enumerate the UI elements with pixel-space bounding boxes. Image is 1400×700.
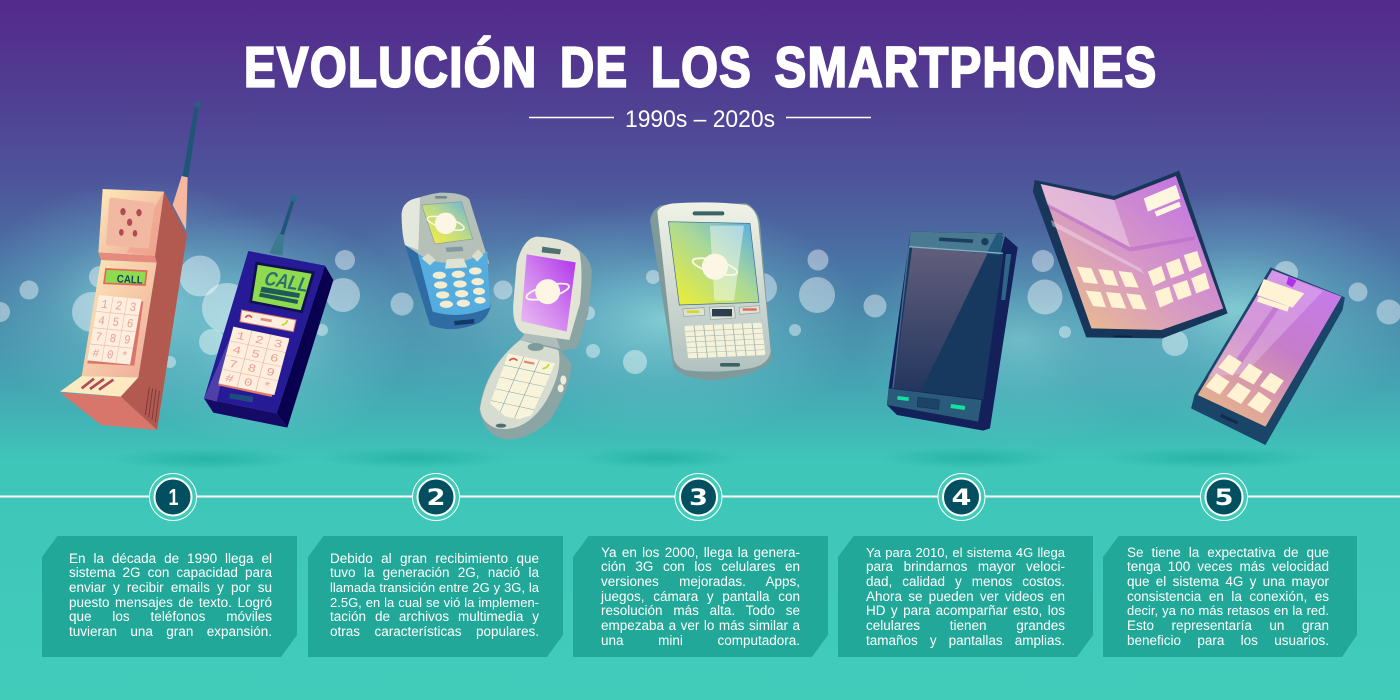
panel: step 4 description [838, 536, 1093, 657]
panel: step 4 description: dad, calidad y menos costos. [866, 574, 1065, 589]
panel: step 2 description: 2.5G, en la cual se vió la implemen- [330, 595, 539, 610]
panel: step 4 description: HD y para acomparñar esto, los [866, 603, 1065, 618]
phone: 3G QWERTY handset [650, 202, 772, 381]
subtitle with date range: 1990s – 2020s [625, 106, 775, 133]
phone: blue 2G handset: CALL [261, 268, 312, 297]
panel: step 3 description [573, 536, 828, 657]
phone: blue 2G handset: 6 [268, 351, 280, 365]
panel: step 2 description: Debido al gran recibimiento que [330, 550, 539, 566]
step marker 1: 1 [168, 484, 179, 510]
step marker 2 [412, 474, 460, 520]
phone: 4G touchscreen smartphone [887, 232, 1018, 431]
panel: step 4 description: Ya para 2010, el sistema 4G llega [866, 544, 1065, 560]
phone: blue 2G handset [204, 195, 333, 428]
phone: brick phone: 8 [108, 332, 117, 347]
panel: step 5 description: decir, ya no más retasos en la red. [1127, 603, 1329, 618]
step marker 2: 2 [426, 486, 446, 511]
panel: step 4 description: Ahora se pueden ver videos en [866, 589, 1065, 604]
panel: step 3 description: ción 3G con los celulares en [601, 559, 800, 574]
phone: brick phone: 0 [105, 349, 114, 363]
phone: brick phone: CALL [117, 273, 143, 287]
panel: step 4 description: celulares tienen grandes [866, 618, 1065, 633]
step marker 3 [675, 474, 722, 520]
panel: step 5 description: que el sistema 4G y una mayor [1127, 574, 1329, 589]
bokeh bubbles [0, 250, 1400, 374]
phone: blue 2G handset: 5 [250, 347, 261, 362]
phone: blue 2G handset: * [261, 379, 273, 394]
phone: blue 2G handset: 2 [253, 333, 265, 347]
phone: blue 2G handset: # [224, 372, 236, 386]
panel: step 5 description: Se tiene la expectativa de que [1127, 544, 1329, 560]
phone: foldable device [1033, 171, 1228, 338]
phone: blue 2G handset: 0 [242, 376, 254, 390]
panel: step 5 description [1103, 536, 1357, 657]
panel: step 3 description: una mini computadora. [601, 633, 800, 648]
panel: step 3 description: empezaba a ver lo más similar a [601, 618, 800, 633]
phone: brick phone: 3 [128, 301, 137, 315]
phone: brick phone: 1 [100, 298, 109, 313]
phone: brick phone: # [91, 347, 100, 362]
timeline line [0, 496, 1400, 498]
panel: step 3 description: versiones mejoradas. Apps, [601, 574, 800, 589]
panel: step 2 description: tuvo la generación 2G, nació la [330, 565, 539, 580]
panel: step 4 description: tamaños y pantallas amplias. [866, 633, 1065, 648]
phone: brick phone: 2 [114, 300, 123, 314]
step marker 4 [938, 474, 985, 520]
phone: blue 2G handset: 1 [235, 329, 247, 344]
phone: future bezel-less smartphone [1191, 267, 1345, 445]
panel: step 1 description: tuvieran una gran expansión. [69, 624, 272, 639]
panel: step 3 description: resolución más alta. Todo se [601, 603, 800, 618]
phone: brick phone: 6 [126, 317, 134, 332]
title: EVOLUCIÓN DE LOS SMARTPHONES [244, 36, 1158, 100]
panel: step 1 description: que los teléfonos móviles [69, 609, 272, 624]
background glow [0, 180, 1400, 450]
panel: step 2 description: tación de archivos multimedia y [330, 609, 539, 624]
phone: blue candybar handset [402, 193, 491, 329]
phone: brick phone [60, 101, 201, 430]
step marker 4: 4 [952, 486, 972, 511]
panel: step 5 description: Esto representaría un gran [1127, 618, 1329, 633]
phone: brick phone: 5 [111, 316, 120, 330]
panel: step 5 description: consistencia en la conexión, es [1127, 589, 1329, 604]
ground shadows [110, 447, 1320, 470]
step marker 5: 5 [1214, 486, 1234, 511]
panel: step 1 description: En la década de 1990 llega el [69, 550, 272, 566]
panel: step 2 description [308, 536, 563, 657]
phone: blue 2G handset: 9 [265, 365, 276, 380]
panel: step 4 description: para brindarnos mayor veloci- [866, 559, 1065, 574]
phone: brick phone: 9 [123, 334, 131, 348]
phone: flip handset [479, 237, 592, 440]
step marker 3: 3 [689, 486, 708, 511]
phone: blue 2G handset: 7 [227, 358, 239, 372]
phone: blue 2G handset: 4 [231, 343, 243, 358]
panel: step 1 description: sistema 2G con capacidad para [69, 565, 272, 580]
phone: blue 2G handset: 8 [246, 361, 258, 376]
phone: blue 2G handset: 3 [272, 337, 284, 351]
phone: brick phone: 7 [94, 331, 103, 345]
panel: step 3 description: juegos, cámara y pantalla con [601, 589, 800, 604]
phone: brick phone: * [120, 350, 129, 364]
panel: step 1 description: enviar y recibir emails y por su [69, 580, 272, 595]
panel: step 2 description: otras características populares. [330, 624, 539, 639]
panel: step 1 description: puesto mensajes de texto. Logró [69, 595, 272, 610]
panel: step 5 description: beneficio para los usuarios. [1127, 633, 1329, 648]
panel: step 5 description: tenga 100 veces más velocidad [1127, 559, 1329, 574]
panel: step 3 description: Ya en los 2000, llega la genera- [601, 544, 800, 560]
phone: brick phone: 4 [97, 314, 106, 329]
panel: step 1 description [42, 536, 297, 657]
step marker 1 [150, 474, 196, 520]
step marker 5 [1200, 474, 1248, 520]
panel: step 2 description: llamada transición entre 2G y 3G, la [330, 580, 539, 595]
